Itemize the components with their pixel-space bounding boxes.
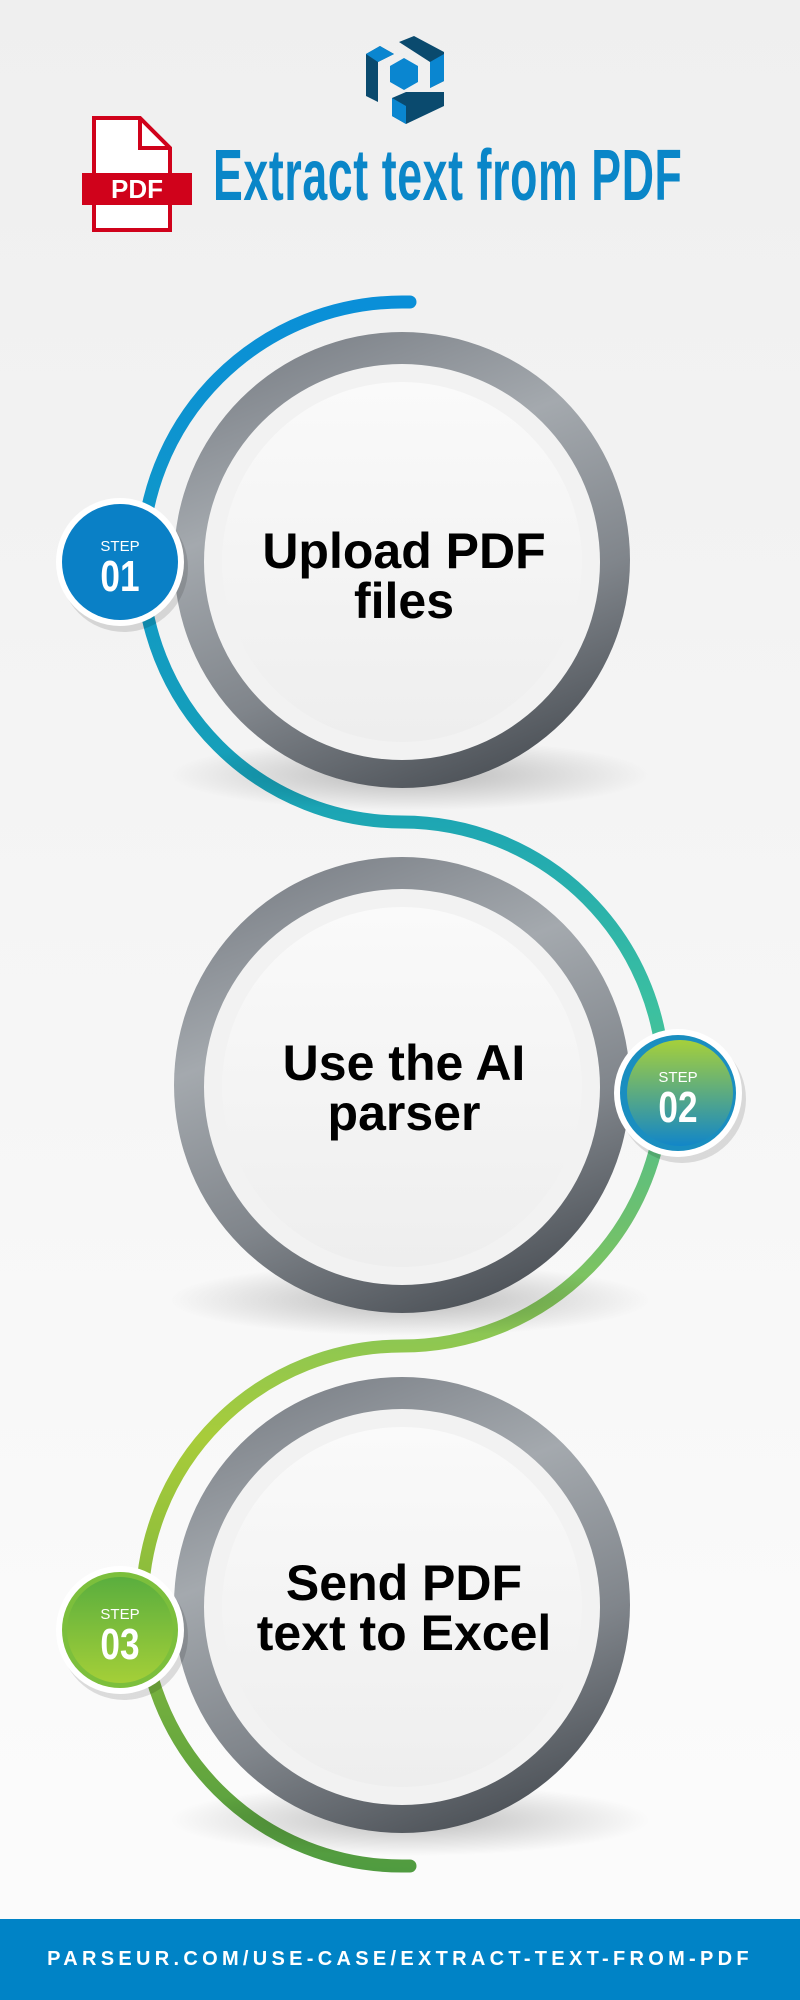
step 01 badge: 01 xyxy=(100,552,140,601)
step 03 badge: 03 xyxy=(100,1620,140,1669)
step 01 badge: STEP xyxy=(100,538,140,555)
step 02 badge: STEP xyxy=(658,1069,698,1086)
circle 3 xyxy=(170,1377,650,1856)
circle 3: text to Excel xyxy=(257,1605,551,1661)
logo xyxy=(366,36,444,124)
circle 1: Upload PDF xyxy=(262,523,546,579)
footer url bar xyxy=(0,1919,800,2000)
circle 3: Send PDF xyxy=(286,1555,522,1611)
title: Extract text from PDF xyxy=(213,136,682,216)
circle 2: Use the AI xyxy=(283,1035,525,1091)
step 03 badge: STEP xyxy=(100,1606,140,1623)
footer url bar: PARSEUR.COM/USE-CASE/EXTRACT-TEXT-FROM-PDF xyxy=(47,1948,753,1970)
circle 2: parser xyxy=(328,1085,480,1141)
circle 1 xyxy=(170,332,650,811)
step 02 badge: 02 xyxy=(658,1083,698,1132)
step 03 badge xyxy=(56,1566,188,1700)
circle 1: files xyxy=(354,573,454,629)
icon: pdf file xyxy=(82,116,192,232)
step 02 badge xyxy=(614,1029,746,1163)
step 01 badge xyxy=(56,498,188,632)
circle 2 xyxy=(170,857,650,1336)
icon: pdf file: PDF xyxy=(111,174,163,204)
